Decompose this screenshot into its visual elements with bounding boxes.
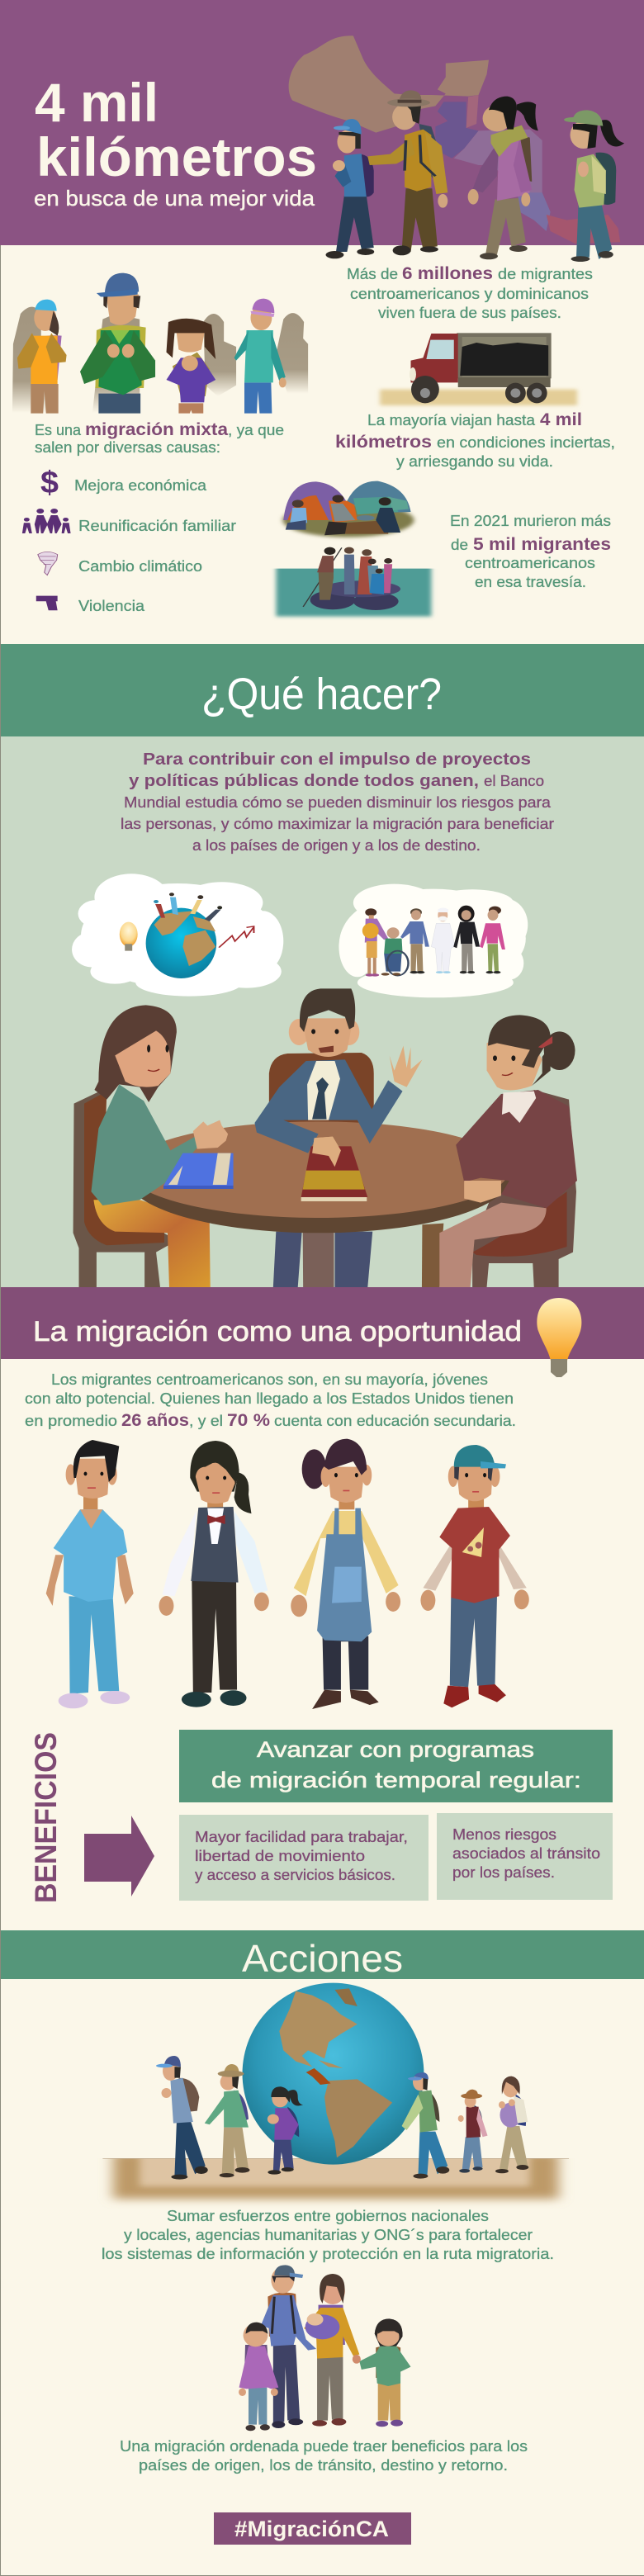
shadow silhouettes xyxy=(12,307,308,413)
figure: young man with teal cap xyxy=(420,1445,529,1707)
text: mixed migration: salen por diversas causas: xyxy=(35,438,220,456)
ground xyxy=(102,2152,569,2199)
panel: temporary migration programs heading: de migración temporal regular: xyxy=(211,1768,581,1792)
migrant: man with hat xyxy=(205,2064,249,2177)
migrant: man with brown backpack xyxy=(156,2056,208,2180)
panel: benefit one xyxy=(179,1815,429,1901)
text: young migrants with potential: Los migrantes centroamericanos son, en su mayoría, jóvenes xyxy=(51,1371,488,1388)
text: six million migrants: 6 millones xyxy=(402,264,493,283)
figure: health worker in blue scrubs xyxy=(46,1440,134,1708)
woman in maroon sweater xyxy=(456,1015,577,1208)
panel: benefit one: libertad de movimiento xyxy=(195,1847,365,1864)
text: four thousand kilometres: 4 mil xyxy=(540,410,582,429)
text: World Bank intro: las personas, y cómo maximizar la migración para beneficiar xyxy=(121,815,554,832)
figure: waiter in vest xyxy=(159,1441,269,1707)
title xyxy=(35,72,317,187)
text: young migrants with potential: 70 % xyxy=(227,1411,270,1430)
hashtag tag: #MigraciónCA xyxy=(234,2517,389,2541)
illustration: truck xyxy=(380,333,577,405)
figure: man in blue xyxy=(400,908,429,973)
panel: benefit two xyxy=(437,1813,613,1900)
text: World Bank intro xyxy=(121,751,554,854)
text: World Bank intro: Para contribuir con el impulso de proyectos xyxy=(143,751,531,769)
heading band: migration as opportunity xyxy=(0,1287,644,1359)
figure: boy with cap xyxy=(326,119,374,258)
title: kilómetros xyxy=(36,126,317,187)
woman in green sweater xyxy=(91,1005,228,1205)
icon: gun xyxy=(36,596,58,610)
text: young migrants with potential: cuenta con educación secundaria. xyxy=(274,1412,516,1429)
legs xyxy=(93,1200,547,1287)
illustration: migrant family xyxy=(239,2265,411,2431)
text: five thousand deaths xyxy=(450,512,611,590)
figure: girl in purple with pigtails xyxy=(166,319,215,414)
text: six million migrants xyxy=(347,264,593,321)
subtitle: en busca de una mejor vida xyxy=(34,186,315,211)
icon: light bulb xyxy=(120,922,138,951)
heading: La migración como una oportunidad: La migración como una oportunidad xyxy=(33,1316,522,1347)
panel: temporary migration programs heading xyxy=(179,1730,613,1802)
panel: benefit two: asociados al tránsito xyxy=(452,1844,600,1862)
mother with baby xyxy=(304,2274,361,2427)
text: orderly migration: países de origen, los de tránsito, destino y retorno. xyxy=(139,2456,508,2474)
icon: small workers on the globe xyxy=(154,893,222,921)
heading band: what to do xyxy=(0,644,644,736)
text: World Bank intro: y políticas públicas donde todos ganen, xyxy=(129,772,479,790)
arrow xyxy=(84,1816,154,1896)
text: young migrants with potential: en promedio xyxy=(25,1412,117,1429)
younger child xyxy=(353,2318,411,2427)
panel: benefit two: Menos riesgos xyxy=(452,1825,556,1843)
panel: benefit two: por los países. xyxy=(452,1863,555,1881)
illustration: group of four young migrants with shadows xyxy=(12,273,308,414)
map of Central America behind the walkers xyxy=(289,36,620,244)
father xyxy=(261,2265,316,2428)
panel: pale green section background xyxy=(0,736,644,1287)
migrant: man with blue cap xyxy=(402,2072,449,2179)
globe xyxy=(243,1983,424,2165)
text: orderly migration: Una migración ordenada puede traer beneficios para los xyxy=(120,2437,528,2455)
figure: nurse xyxy=(431,907,455,973)
figure: child in teal with purple cap xyxy=(234,299,286,414)
older child xyxy=(239,2323,278,2431)
text: World Bank intro: Mundial estudia cómo se pueden disminuir los riesgos para xyxy=(124,793,552,811)
cause: family reunification: Reunificación familiar xyxy=(78,517,236,534)
chairs xyxy=(73,1053,576,1287)
text: join efforts: los sistemas de información y protección en la ruta migratoria. xyxy=(102,2245,554,2262)
icon: tornado xyxy=(38,552,58,575)
text: join efforts: y locales, agencias humanitarias y ONG´s para fortalecer xyxy=(124,2226,533,2243)
man in blue suit xyxy=(254,988,422,1167)
hashtag tag xyxy=(214,2512,411,2545)
icon: dollar sign: $ xyxy=(40,466,59,500)
text: six million migrants: Más de xyxy=(347,265,398,282)
text: six million migrants: viven fuera de sus países. xyxy=(378,304,561,321)
illustration: people crossing river on a raft xyxy=(276,547,431,617)
figure: man with hat xyxy=(367,90,447,255)
migrant: child with hat xyxy=(458,2090,488,2173)
text: five thousand deaths: de xyxy=(451,536,468,553)
cause: economic improvement: Mejora económica xyxy=(74,476,207,494)
heading band: actions xyxy=(0,1930,644,1980)
icon: globe xyxy=(146,908,216,978)
figure: woman with green cap xyxy=(564,110,624,262)
icon: large light bulb xyxy=(537,1298,581,1377)
icon: family xyxy=(22,509,71,533)
book: blue xyxy=(163,1153,234,1189)
figure: child in orange xyxy=(17,300,67,414)
vertical label: BENEFICIOS: BENEFICIOS xyxy=(29,1732,63,1903)
text: World Bank intro: a los países de origen y a los de destino. xyxy=(192,836,481,854)
text: mixed migration xyxy=(35,420,284,456)
panel: benefit one: Mayor facilidad para trabajar, xyxy=(195,1828,408,1845)
text: young migrants with potential: , y el xyxy=(189,1412,223,1429)
text: four thousand kilometres: en condiciones inciertas, xyxy=(437,433,615,451)
panel: temporary migration programs heading: Avanzar con programas xyxy=(257,1737,534,1762)
text: young migrants with potential: 26 años xyxy=(121,1411,189,1430)
migrant: girl in purple xyxy=(268,2086,303,2175)
icon: growth arrow xyxy=(219,926,253,948)
illustration: four working migrants xyxy=(46,1439,529,1709)
book: red and yellow xyxy=(301,1137,367,1201)
text: five thousand deaths: centroamericanos xyxy=(465,554,595,571)
text: mixed migration: , ya que xyxy=(228,421,284,438)
figure: child in green with blue cap xyxy=(80,273,155,414)
text: four thousand kilometres: La mayoría viajan hasta xyxy=(367,411,536,429)
heading: ¿Qué hacer?: ¿Qué hacer? xyxy=(201,670,442,719)
illustration: three people at a meeting table xyxy=(73,988,577,1287)
text: young migrants with potential xyxy=(25,1371,516,1430)
panel: benefit one: y acceso a servicios básicos. xyxy=(195,1866,395,1883)
text: join efforts: Sumar esfuerzos entre gobiernos nacionales xyxy=(167,2207,489,2224)
text: mixed migration: migración mixta xyxy=(85,420,228,439)
text: World Bank intro: el Banco xyxy=(484,772,544,789)
thought cloud: globe with workers, bulb and growth arrow xyxy=(72,874,283,997)
figure: woman in pink xyxy=(480,907,505,973)
text: four thousand kilometres xyxy=(335,410,615,470)
text: mixed migration: Es una xyxy=(35,421,82,438)
text: four thousand kilometres: kilómetros xyxy=(335,433,432,452)
illustration: globe with migrants walking xyxy=(102,1983,569,2199)
migrant: woman in lilac xyxy=(495,2076,528,2173)
text: six million migrants: de migrantes xyxy=(498,265,593,282)
thought cloud: diverse group of people xyxy=(339,884,528,997)
text: young migrants with potential: con alto potencial. Quienes han llegado a los Estados Unidos tienen xyxy=(25,1390,514,1407)
table xyxy=(127,1121,509,1233)
heading: Acciones: Acciones xyxy=(242,1937,403,1980)
cause: climate change: Cambio climático xyxy=(78,557,202,575)
figure: woman in apron xyxy=(291,1439,400,1709)
text: join efforts xyxy=(102,2207,554,2262)
figure: woman with scarf xyxy=(468,97,538,259)
text: five thousand deaths: en esa travesía. xyxy=(475,573,586,590)
figure: woman in black xyxy=(453,906,480,973)
text: four thousand kilometres: y arriesgando su vida. xyxy=(396,452,553,470)
text: five thousand deaths: En 2021 murieron más xyxy=(450,512,611,529)
title: 4 mil xyxy=(35,72,159,133)
illustration: camp with tents xyxy=(282,481,414,537)
text: orderly migration xyxy=(120,2437,528,2474)
figure: man in wheelchair xyxy=(381,927,409,976)
figure: woman with baby xyxy=(362,908,388,977)
panel: header band xyxy=(0,0,644,245)
text: five thousand deaths: 5 mil migrantes xyxy=(473,535,611,554)
text: six million migrants: centroamericanos y dominicanos xyxy=(350,285,589,302)
cause: violence: Violencia xyxy=(78,597,145,614)
illustration: four migrants walking xyxy=(326,90,624,262)
